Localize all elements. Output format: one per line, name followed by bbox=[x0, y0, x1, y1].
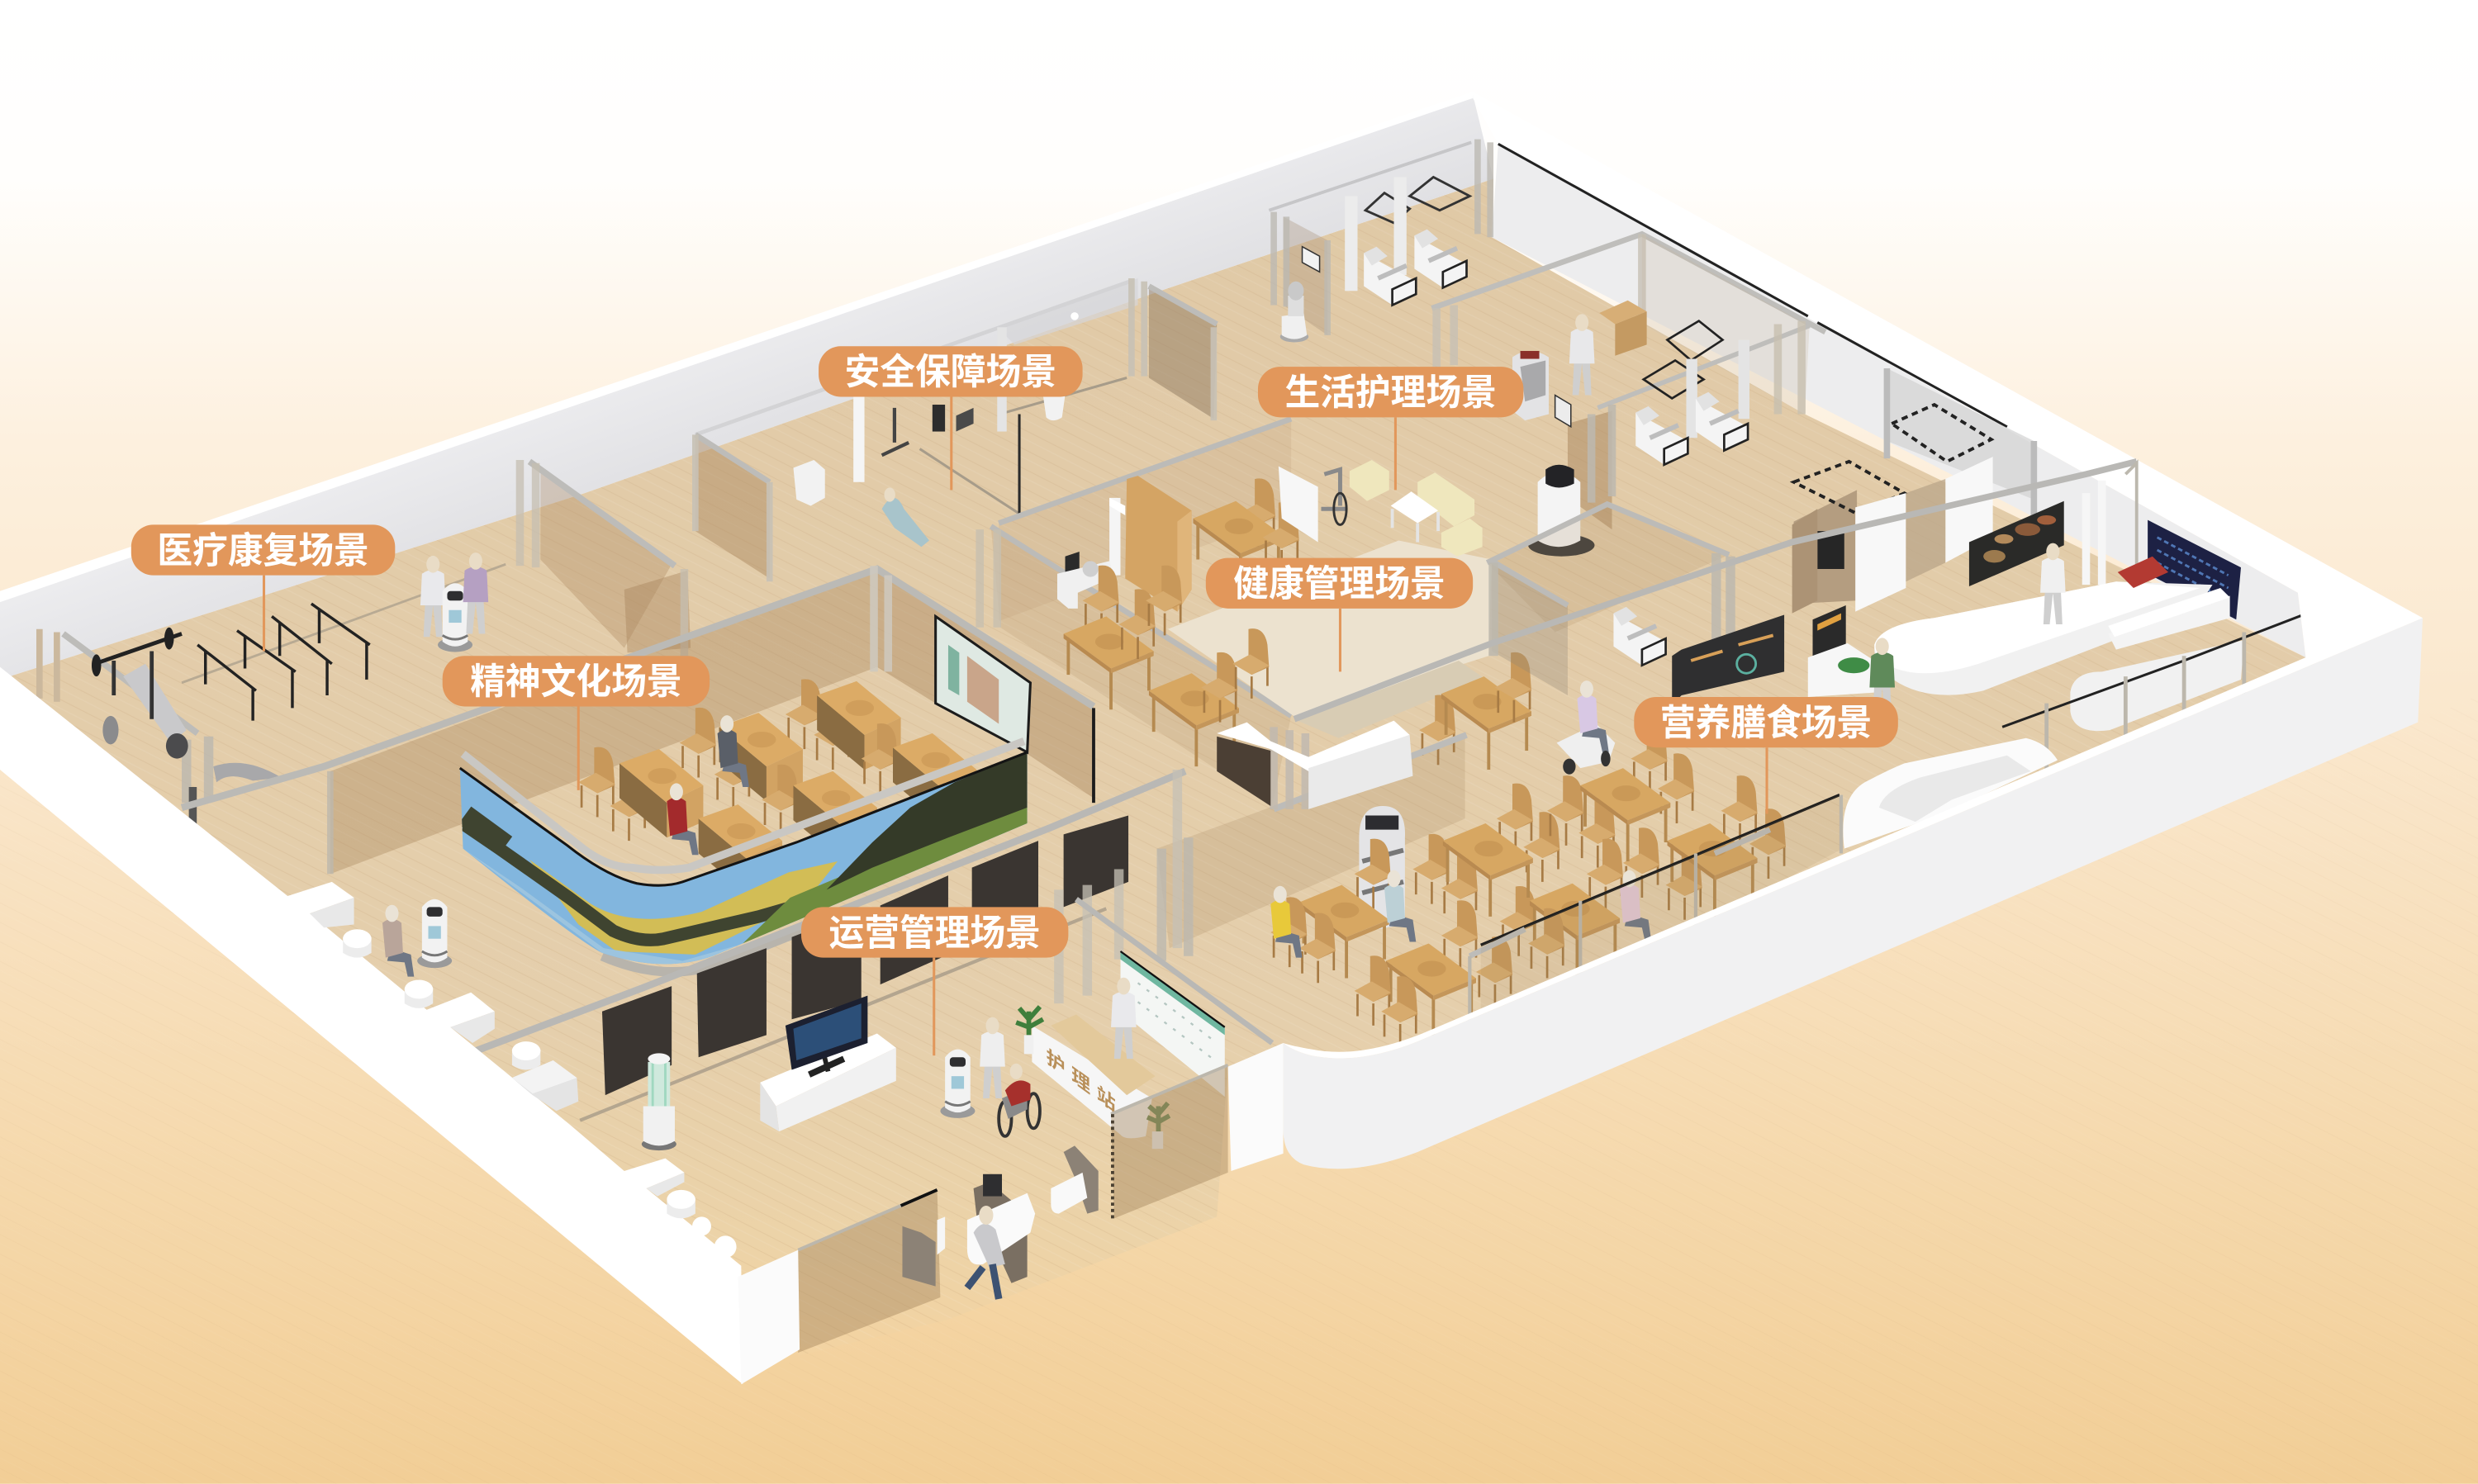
left wall end cap bbox=[738, 1250, 800, 1384]
seated visitor with robot near left wall bbox=[382, 899, 452, 977]
visitor walking in bbox=[967, 1206, 1005, 1299]
gym equipment bbox=[92, 628, 282, 846]
left outer wall with seating blocks bbox=[0, 667, 743, 1384]
leader line: nutrition bbox=[1766, 747, 1768, 814]
plants bbox=[1016, 1007, 1170, 1149]
front glass and right side kitchen unit bbox=[2002, 614, 2307, 775]
parallel bars bbox=[197, 604, 370, 721]
room: care bedrooms bbox=[1269, 140, 1825, 414]
lounge furniture bbox=[1279, 460, 1483, 557]
room: rehabilitation glass walls bbox=[40, 460, 691, 803]
label: nutrition meals: 营养膳食场景 bbox=[1660, 703, 1872, 743]
label: medical rehabilitation bbox=[131, 524, 395, 576]
big reception screen bbox=[1121, 951, 1225, 1097]
back wall bbox=[0, 92, 1493, 676]
large wall screen bbox=[936, 616, 1030, 752]
label: nutrition meals bbox=[1634, 697, 1898, 747]
label: medical rehabilitation: 医疗康复场景 bbox=[157, 530, 369, 571]
dining tables and chairs bbox=[1270, 723, 1786, 1046]
label: health management: 健康管理场景 bbox=[1233, 564, 1446, 605]
label: spiritual culture: 精神文化场景 bbox=[470, 661, 682, 702]
serving robot bbox=[1359, 806, 1405, 932]
serving counter bbox=[1874, 543, 2230, 695]
room: safety glass walls bbox=[695, 278, 1217, 581]
operations room rail and dark panels bbox=[476, 770, 1272, 1121]
room: fridge storage and kitchen bbox=[1792, 368, 2034, 614]
bed and scooter bbox=[1557, 607, 1666, 775]
dining room glass partition bbox=[1157, 721, 1467, 960]
safety room fixtures and person bbox=[793, 393, 1066, 547]
label: safety: 安全保障场景 bbox=[845, 352, 1056, 392]
label: health management bbox=[1206, 558, 1473, 609]
label: life care bbox=[1258, 367, 1523, 417]
entrance turnstiles bbox=[902, 1145, 1099, 1287]
label: operations management: 运营管理场景 bbox=[829, 913, 1041, 953]
long rail and post set bbox=[1487, 505, 1730, 695]
curved panorama wall bbox=[460, 742, 1028, 972]
floor plan base bbox=[0, 178, 2305, 1356]
reception sign: 护理站 bbox=[1047, 1045, 1122, 1121]
leader line: health bbox=[1339, 609, 1341, 671]
desks and chairs in culture room bbox=[578, 679, 976, 893]
leader line: life care bbox=[1394, 417, 1396, 490]
label: safety bbox=[819, 346, 1083, 396]
dashboard screen bbox=[2148, 520, 2241, 619]
delivery robot with black head bbox=[1528, 465, 1594, 557]
floor wood planks bbox=[0, 178, 2305, 1356]
carpet bbox=[1168, 541, 1492, 718]
leader line: operations bbox=[933, 958, 935, 1055]
front desk robot and people bbox=[940, 1017, 1040, 1136]
label: operations management bbox=[801, 907, 1068, 958]
reception desk bbox=[1032, 978, 1156, 1138]
room: health management bbox=[980, 419, 1531, 806]
culture room walls bbox=[182, 566, 1094, 874]
leader line: medical bbox=[263, 576, 265, 651]
leader line: culture bbox=[577, 706, 579, 790]
kitchen post and small sign bbox=[1813, 463, 2137, 657]
entrance glass panels bbox=[798, 1065, 1228, 1353]
leader line: safety bbox=[951, 396, 952, 490]
label: life care: 生活护理场景 bbox=[1284, 372, 1497, 413]
dining front glass rail bbox=[1469, 795, 1841, 1051]
wood wardrobe bbox=[1125, 476, 1192, 612]
label: spiritual culture bbox=[443, 656, 710, 706]
right wall bbox=[1473, 92, 2423, 657]
front wall with curved corner bbox=[1228, 593, 2423, 1171]
long glass rail bbox=[1294, 462, 2137, 719]
display stand with green dishes bbox=[1808, 638, 1895, 719]
health data screen bbox=[1672, 614, 1784, 705]
doctor, robot and patient bbox=[420, 552, 488, 652]
exterior wood grain ground bbox=[0, 695, 2478, 1484]
curved white partition bbox=[1843, 738, 2058, 849]
room: care bedroom two bbox=[1512, 301, 1810, 529]
tv cabinet with monitor bbox=[760, 996, 896, 1131]
menu screen bbox=[1969, 501, 2064, 586]
UV disinfection robot bbox=[642, 1053, 676, 1150]
